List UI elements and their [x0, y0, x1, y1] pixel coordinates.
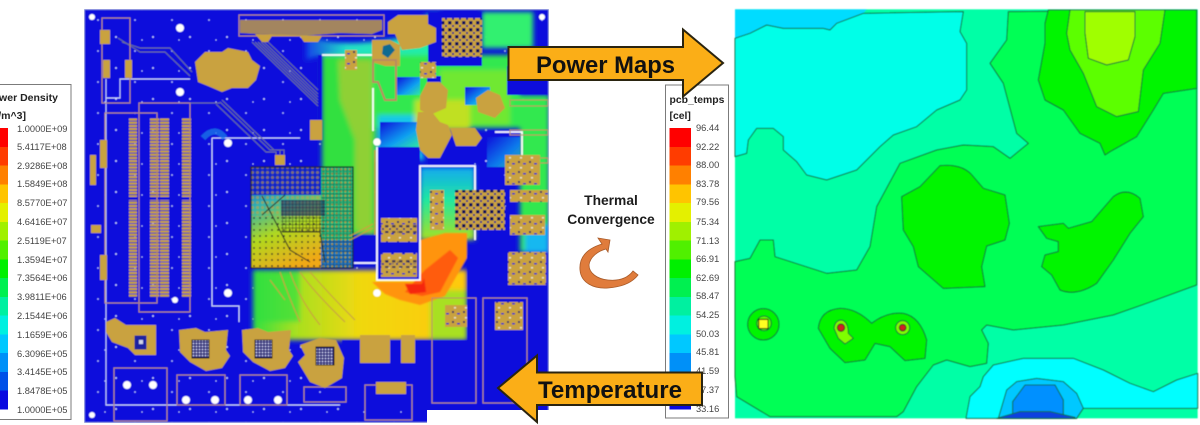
panel: power density legend	[0, 84, 71, 420]
legend values: 2.5119E+07	[17, 236, 67, 246]
arrow: temperature	[498, 356, 702, 422]
temperature legend values: 71.13	[696, 236, 719, 246]
heat inset squares	[397, 77, 420, 95]
temperature legend values: 33.16	[696, 404, 719, 414]
temperature legend values: 58.47	[696, 291, 719, 301]
contour: right blob	[1038, 192, 1143, 292]
contour: top-right hot zones	[1038, 10, 1197, 155]
temperature legend values: 37.37	[696, 385, 719, 395]
memory slots	[129, 118, 191, 297]
temperature legend values: 79.56	[696, 197, 719, 207]
contour: bottom cold zones	[966, 358, 1198, 418]
legend values: 3.9811E+06	[17, 292, 67, 302]
label: Thermal Convergence: Thermal	[584, 193, 638, 208]
temperature colour bar	[670, 128, 691, 410]
label: Thermal Convergence	[567, 193, 655, 227]
arrow label: power maps: Power Maps	[536, 52, 675, 79]
contour: main green zone	[735, 10, 1197, 417]
temperature legend title: pcb_temps	[670, 95, 725, 106]
contour: hot spot left	[748, 309, 779, 340]
temperature legend values: 92.22	[696, 142, 719, 152]
temperature legend values: 75.34	[696, 217, 719, 227]
hot spot	[372, 233, 467, 305]
legend values: 3.4145E+05	[17, 367, 67, 377]
legend values: 6.3096E+05	[17, 349, 67, 359]
icon: circular arrow	[580, 238, 638, 288]
legend values: 8.5770E+07	[17, 198, 67, 208]
contour: top-left cold corner	[735, 9, 867, 38]
legend values: 2.9286E+08	[17, 161, 67, 171]
mounting holes	[89, 14, 545, 418]
contour: cyan zone	[735, 12, 967, 180]
heat map regions	[253, 12, 549, 340]
temperature legend values: 54.25	[696, 310, 719, 320]
temperature legend values: 96.44	[696, 123, 719, 133]
arrow: power maps	[508, 30, 723, 96]
speckled component areas	[345, 50, 548, 330]
outlines tan	[102, 15, 548, 421]
temperature legend values: 41.59	[696, 366, 719, 376]
contour: central blob	[902, 165, 1009, 288]
legend values: 1.0000E+09	[17, 124, 67, 134]
legend values: 1.5849E+08	[17, 179, 67, 189]
temperature legend values: 45.81	[696, 347, 719, 357]
legend values	[17, 124, 67, 415]
temperature legend values: 66.91	[696, 254, 719, 264]
temperature legend values	[696, 123, 719, 414]
legend values: 1.3594E+07	[17, 255, 67, 265]
legend values: 1.1659E+06	[17, 330, 67, 340]
temperature legend values: 88.00	[696, 160, 719, 170]
legend values: 5.4117E+08	[17, 142, 67, 152]
dark lattice chips	[381, 18, 505, 268]
contour: twin hot spots	[818, 308, 927, 363]
legend values: 1.0000E+05	[17, 405, 67, 415]
chip centres	[134, 335, 334, 365]
temperature legend values: 83.78	[696, 179, 719, 189]
temperature legend values: 62.69	[696, 273, 719, 283]
temperature legend values: 50.03	[696, 329, 719, 339]
blue cut-outs	[318, 12, 549, 410]
diagonal traces	[118, 38, 318, 165]
gold component clusters	[90, 15, 505, 394]
legend values: 2.1544E+06	[17, 311, 67, 321]
legend values: 1.8478E+05	[17, 386, 67, 396]
legend values: 4.6416E+07	[17, 217, 67, 227]
temperature legend unit: [cel]	[670, 111, 691, 122]
gold traces from package	[270, 150, 375, 325]
legend colour bar	[0, 128, 8, 410]
panel: PCB power map	[84, 9, 549, 423]
label: Thermal Convergence: Convergence	[567, 212, 655, 227]
CPU package	[251, 167, 353, 268]
outlines	[322, 55, 522, 280]
arrow label: temperature: Temperature	[538, 377, 682, 404]
panel: PCB temperature legend	[666, 85, 728, 418]
legend values: 7.3564E+06	[17, 273, 67, 283]
panel: temperature contour map	[735, 9, 1198, 418]
